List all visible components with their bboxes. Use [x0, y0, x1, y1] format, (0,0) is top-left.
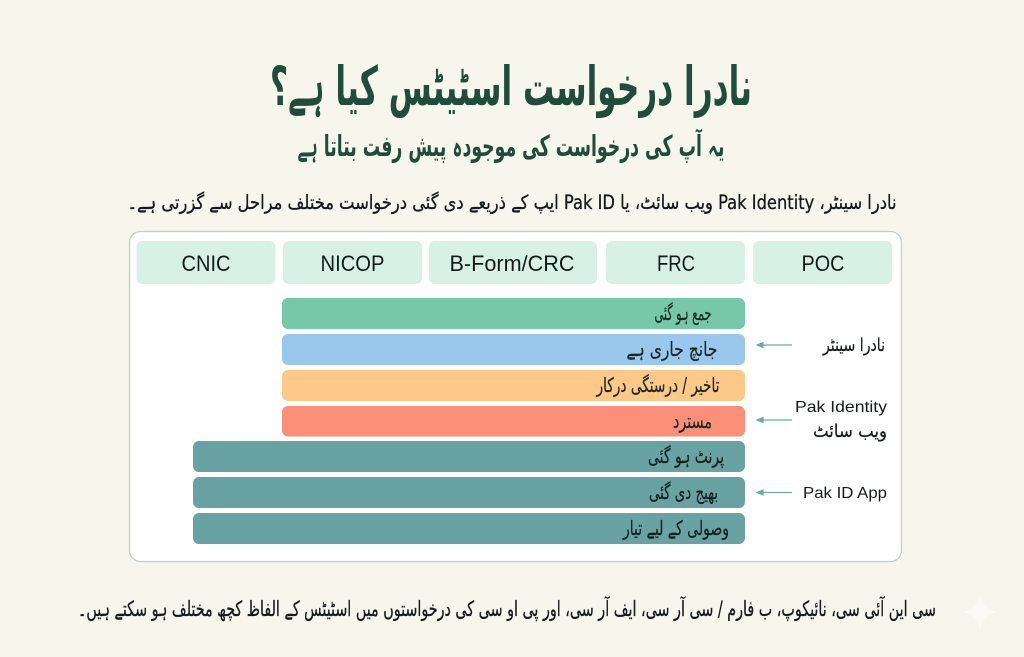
bar: rejected	[282, 406, 745, 436]
bar: submitted	[282, 298, 745, 329]
label: Pak Identity website: Pak Identity	[795, 399, 887, 416]
label: Pak ID App: Pak ID App	[803, 485, 887, 502]
label: Pak Identity website: ویب سائٹ	[813, 421, 887, 442]
chip: CNIC: CNIC	[182, 251, 231, 276]
arrow: NADRA centre	[757, 342, 792, 348]
bar: delay or correction required: تاخیر / درستگی درکار	[596, 373, 720, 397]
bar: delay or correction required	[282, 370, 745, 401]
arrow: Pak ID App	[757, 490, 792, 495]
panel: status chart	[130, 232, 902, 562]
chip: FRC: FRC	[657, 251, 695, 276]
bar: printed	[193, 441, 745, 472]
intro text: نادرا سینٹر، Pak Identity ویب سائٹ، یا Pak ID ایپ کے ذریعے دی گئی درخواست مختلف مراحل سے گزرتی ہے۔	[128, 191, 896, 214]
label: NADRA centre: نادرا سینٹر	[822, 335, 885, 356]
bar: printed: پرنٹ ہو گئی	[648, 444, 724, 469]
chip: NICOP	[283, 241, 422, 284]
bar: submitted: جمع ہو گئی	[654, 301, 712, 325]
bar: ready for collection: وصولی کے لیے تیار	[622, 516, 729, 540]
chip: CNIC	[136, 241, 276, 284]
chip: POC	[753, 241, 892, 284]
arrow: Pak Identity website	[757, 418, 792, 422]
bar: ready for collection	[193, 513, 745, 544]
chip: POC: POC	[802, 251, 845, 276]
bar: under review: جانچ جاری ہے	[626, 337, 718, 361]
chip: B-Form/CRC	[429, 241, 597, 284]
icon: sparkle	[963, 594, 997, 630]
chip: NICOP: NICOP	[320, 251, 384, 276]
bar: dispatched	[193, 477, 745, 508]
bar: rejected: مسترد	[673, 409, 712, 433]
subtitle: یہ آپ کی درخواست کی موجودہ پیش رفت بتاتا ہے	[298, 128, 724, 164]
label: Pak Identity website	[795, 399, 887, 442]
bar: under review	[282, 334, 745, 365]
chip: FRC	[606, 241, 745, 284]
bar: dispatched: بھیج دی گئی	[649, 480, 718, 504]
chip: B-Form/CRC: B-Form/CRC	[450, 251, 575, 276]
